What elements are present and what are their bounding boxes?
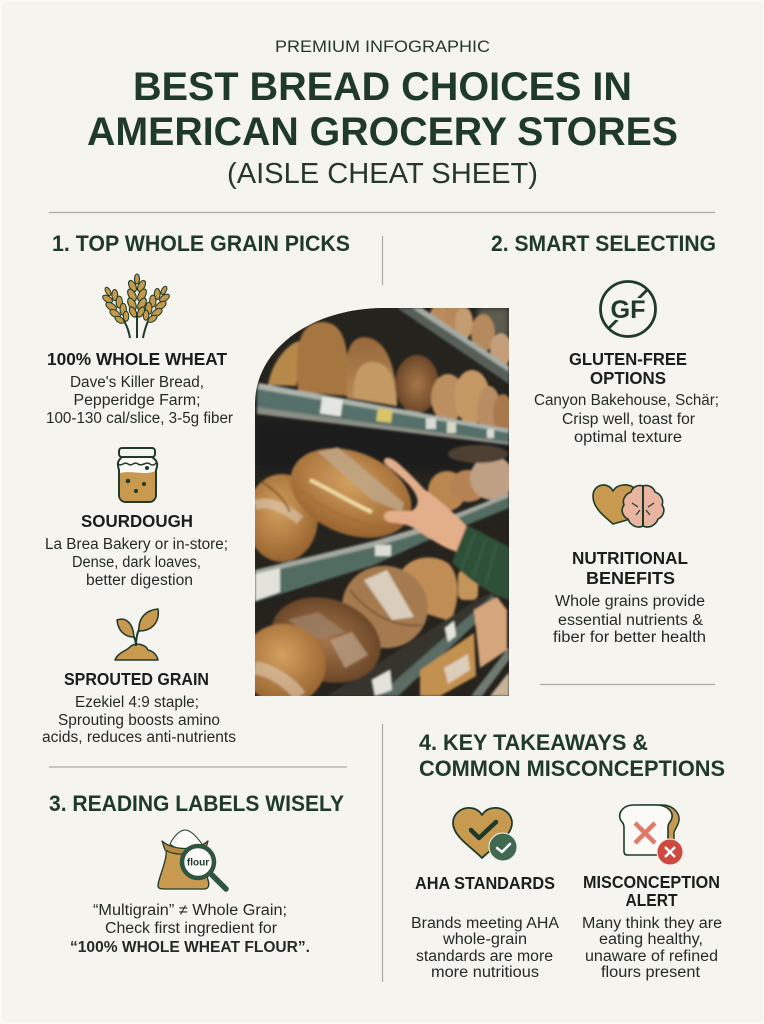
item: 100% whole wheat bbox=[46, 349, 233, 427]
icon: flour bag with magnifier: flour bbox=[187, 858, 209, 868]
hand bbox=[384, 458, 467, 552]
item: misconception alert: MISCONCEPTION bbox=[583, 872, 720, 892]
text block: “100% WHOLE WHEAT FLOUR”. bbox=[70, 939, 310, 956]
lower back square loaves bbox=[399, 557, 458, 621]
item: gluten-free options bbox=[534, 349, 719, 446]
icon: flour bag with magnifier bbox=[158, 830, 226, 889]
held loaf bbox=[290, 446, 413, 540]
back right loaves bbox=[428, 471, 466, 511]
item: sourdough: SOURDOUGH bbox=[81, 511, 193, 531]
text block: Check first ingredient for bbox=[105, 920, 277, 937]
item: gluten-free options: Canyon Bakehouse, Schär; bbox=[534, 392, 719, 409]
subtitle: (AISLE CHEAT SHEET) bbox=[227, 158, 538, 190]
item: AHA standards: AHA STANDARDS bbox=[415, 873, 555, 893]
item: sprouted grain: acids, reduces anti-nutrients bbox=[42, 729, 236, 746]
item: nutritional benefits: Whole grains provide bbox=[555, 593, 705, 610]
item: AHA standards: Brands meeting AHA bbox=[411, 915, 560, 932]
item: 100% whole wheat: Dave's Killer Bread, bbox=[70, 374, 204, 391]
icon: wheat bbox=[97, 274, 175, 338]
photo: hand choosing a loaf from store shelves bbox=[255, 308, 509, 696]
item: nutritional benefits: NUTRITIONAL bbox=[572, 548, 688, 568]
header bbox=[87, 37, 678, 190]
heading: COMMON MISCONCEPTIONS bbox=[419, 756, 725, 781]
shelf three surface and front bbox=[327, 590, 498, 696]
item: 100% whole wheat: Pepperidge Farm; bbox=[74, 392, 200, 409]
heading: 2. SMART SELECTING bbox=[491, 231, 716, 256]
item: 100% whole wheat: 100-130 cal/slice, 3-5g fiber bbox=[46, 410, 233, 427]
item: AHA standards: whole-grain bbox=[442, 931, 527, 948]
upper shelf bbox=[397, 308, 509, 384]
section 4: key takeaways and common misconceptions bbox=[411, 730, 725, 981]
item: misconception alert: eating healthy, bbox=[599, 931, 703, 948]
sleeve bbox=[452, 525, 509, 600]
item: nutritional benefits: fiber for better health bbox=[553, 629, 706, 646]
item: AHA standards bbox=[411, 873, 560, 981]
icon: sourdough jar bbox=[118, 448, 157, 502]
heading: 1. TOP WHOLE GRAIN PICKS bbox=[52, 231, 350, 256]
item: nutritional benefits: BENEFITS bbox=[586, 568, 675, 588]
item: sprouted grain: Sprouting boosts amino bbox=[58, 712, 220, 729]
title: AMERICAN GROCERY STORES bbox=[87, 110, 678, 154]
bottom right bagged loaves bbox=[420, 633, 476, 696]
icon: heart with check bbox=[453, 808, 517, 861]
icon: gluten-free: GF bbox=[610, 296, 646, 324]
item: gluten-free options: GLUTEN-FREE bbox=[569, 349, 687, 369]
icon: sprout bbox=[115, 609, 158, 660]
item: misconception alert: ALERT bbox=[626, 890, 678, 910]
item: misconception alert: flours present bbox=[601, 964, 701, 981]
item: AHA standards: more nutritious bbox=[431, 964, 539, 981]
heading: 3. READING LABELS WISELY bbox=[49, 791, 344, 816]
text block: “Multigrain” ≠ Whole Grain; bbox=[93, 902, 287, 919]
item: sprouted grain bbox=[42, 669, 236, 746]
heading bbox=[419, 730, 725, 781]
item: misconception alert bbox=[582, 872, 722, 981]
top row loaves bbox=[268, 341, 301, 386]
item: gluten-free options: OPTIONS bbox=[590, 368, 666, 388]
section 2: smart selecting bbox=[491, 231, 719, 646]
section 3: reading labels wisely bbox=[49, 791, 344, 956]
title: BEST BREAD CHOICES IN bbox=[133, 65, 632, 109]
item: nutritional benefits: essential nutrients & bbox=[558, 612, 704, 629]
item: 100% whole wheat: 100% WHOLE WHEAT bbox=[47, 349, 227, 369]
icon: gluten-free bbox=[600, 282, 656, 336]
item: gluten-free options: optimal texture bbox=[574, 429, 682, 446]
upper back loaves bbox=[429, 308, 449, 324]
item: sprouted grain: Ezekiel 4:9 staple; bbox=[75, 694, 199, 711]
item: AHA standards: standards are more bbox=[416, 948, 553, 965]
item: misconception alert: unaware of refined bbox=[585, 948, 718, 965]
icon: heart and brain bbox=[593, 485, 664, 527]
text block bbox=[70, 902, 310, 956]
shelf two bbox=[255, 497, 509, 602]
item: gluten-free options: Crisp well, toast for bbox=[562, 411, 695, 428]
section 1: top whole grain picks bbox=[42, 231, 350, 746]
title bbox=[87, 65, 678, 154]
icon: bread with warning bbox=[620, 805, 683, 865]
item: sourdough bbox=[45, 511, 228, 589]
eyebrow: premium infographic: PREMIUM INFOGRAPHIC bbox=[275, 37, 490, 56]
item: sourdough: better digestion bbox=[86, 572, 193, 589]
item: misconception alert: Many think they are bbox=[582, 915, 722, 932]
item: sourdough: Dense, dark loaves, bbox=[72, 554, 201, 571]
item: sourdough: La Brea Bakery or in-store; bbox=[45, 536, 228, 553]
heading: 4. KEY TAKEAWAYS & bbox=[419, 730, 648, 755]
item: sprouted grain: SPROUTED GRAIN bbox=[64, 669, 209, 689]
large front loaves bbox=[246, 474, 318, 562]
item: nutritional benefits bbox=[553, 548, 706, 646]
shelf one bbox=[257, 384, 509, 442]
